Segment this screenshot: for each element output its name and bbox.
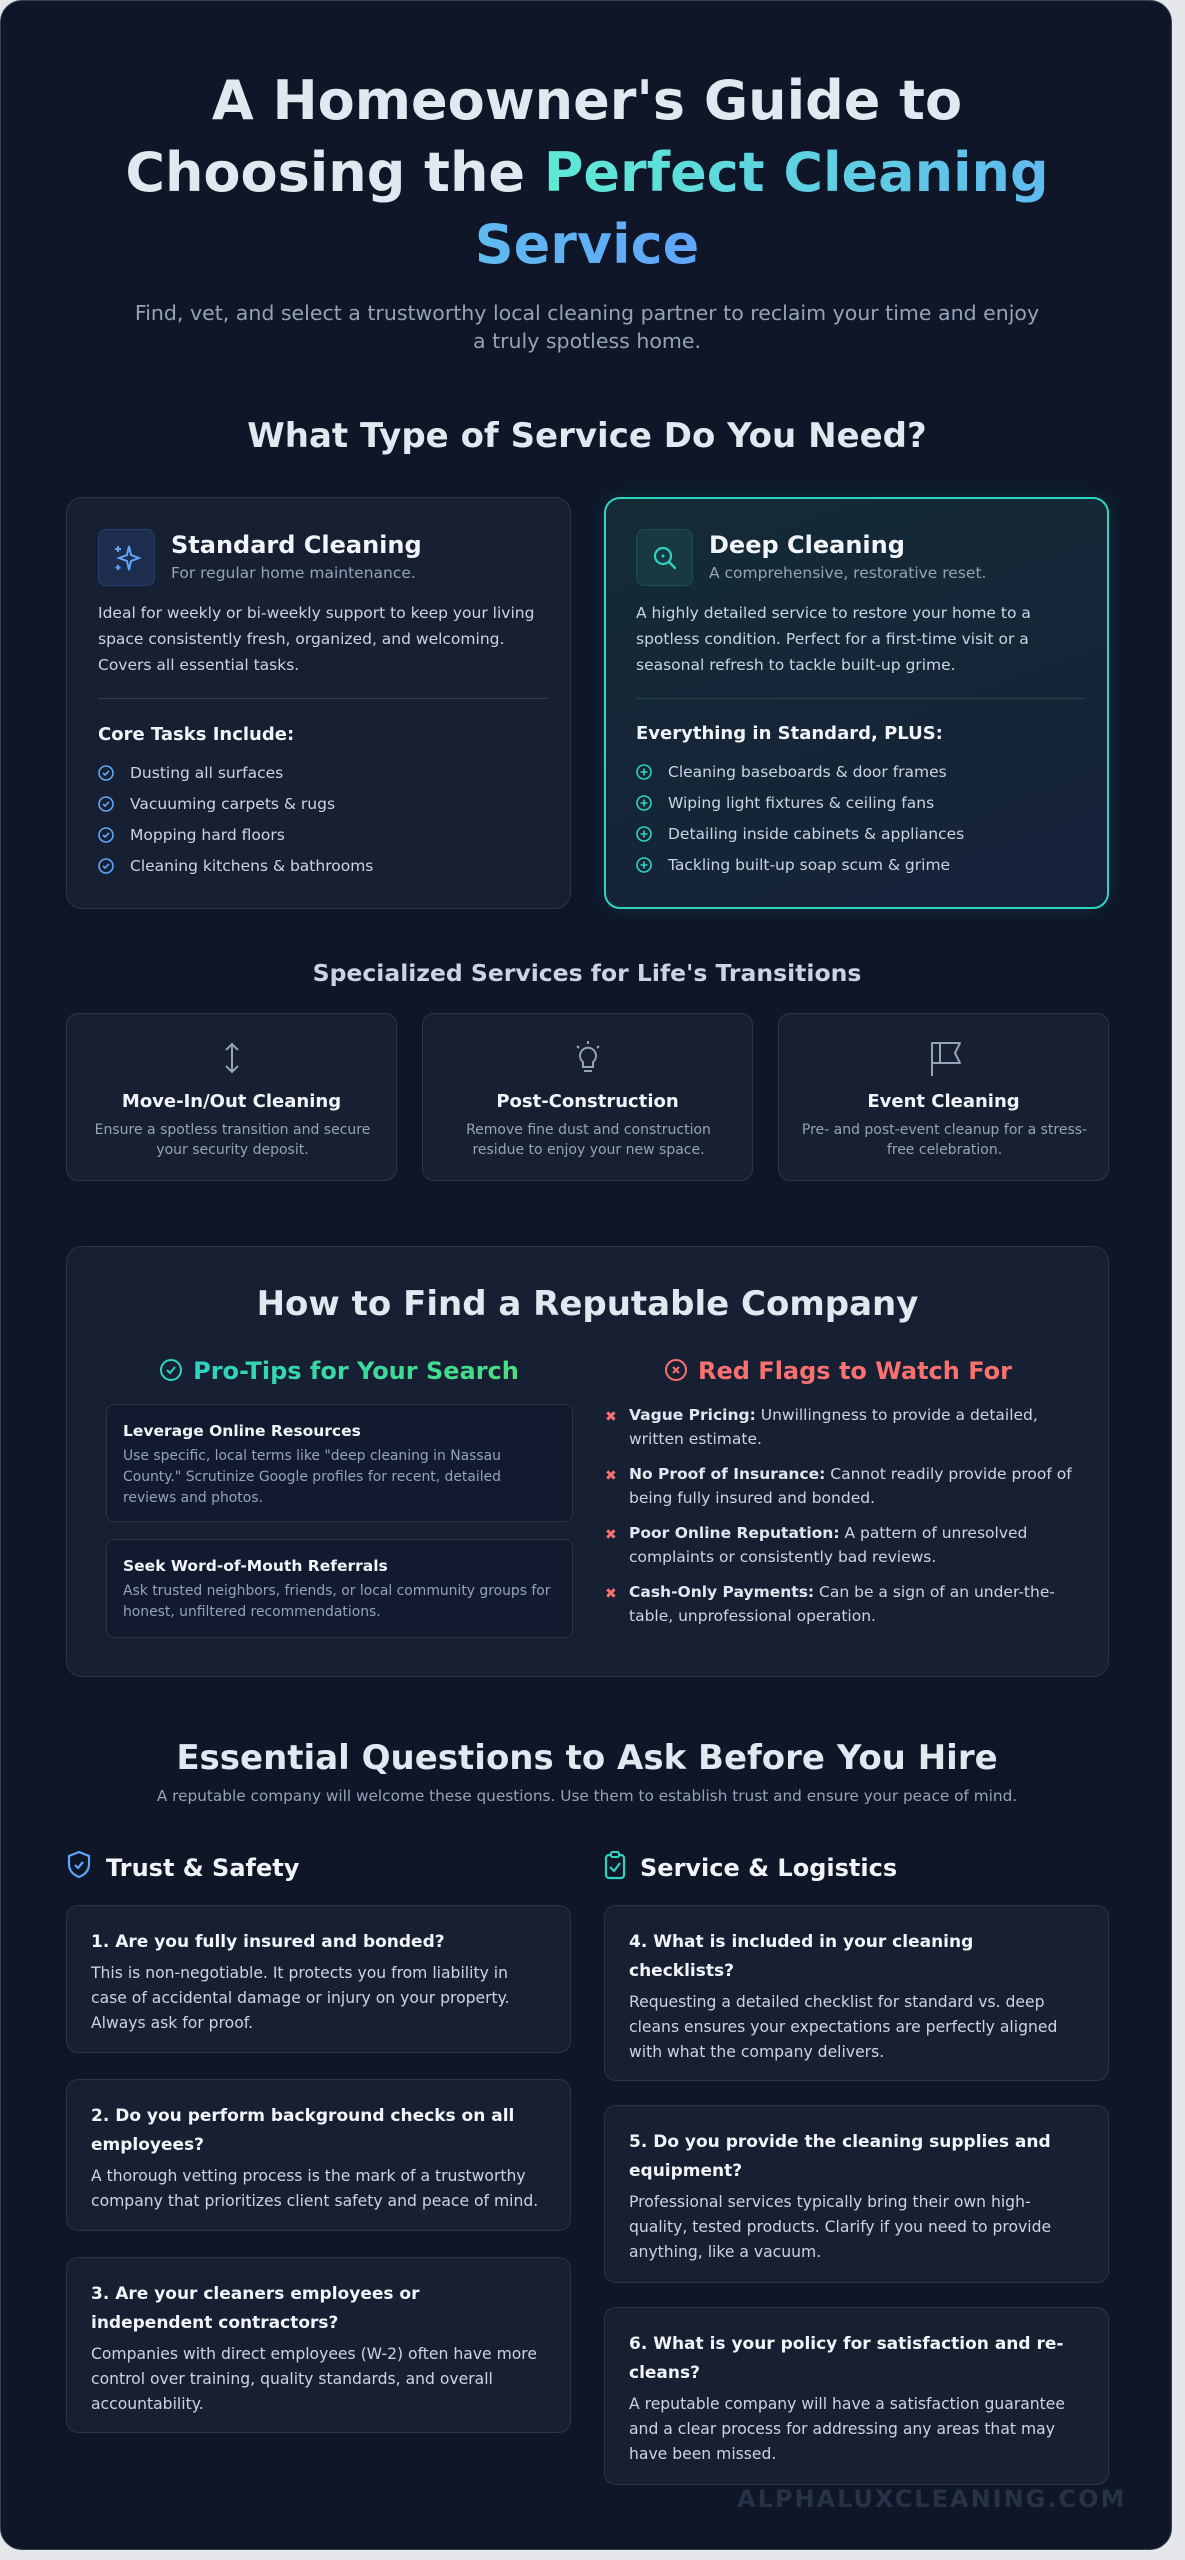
question 5: 5. Do you provide the cleaning supplies and equipment? (629, 2132, 1051, 2181)
text: Poor Online Reputation: A pattern of unresolved complaints or consistently bad reviews. (629, 1524, 1027, 1566)
question 3: control over training, quality standards, and overall (91, 2370, 493, 2388)
heading: essential questions: Essential Questions to Ask Before You Hire (176, 1738, 998, 1778)
question 4: with what the company delivers. (629, 2043, 884, 2061)
icon: lightbulb (576, 1041, 600, 1072)
tip: referrals: Seek Word-of-Mouth Referrals (123, 1557, 388, 1575)
icon: arrows (225, 1042, 239, 1074)
panel: find reputable company (66, 1246, 1109, 1677)
text: Cash-Only Payments: Can be a sign of an under-the-table, unprofessional operation. (629, 1583, 1055, 1625)
tip: online resources: Use specific, local terms like "deep cleaning in Nassau (123, 1448, 501, 1464)
column heading: trust & safety: Trust & Safety (106, 1854, 299, 1882)
description: A highly detailed service to restore your home to a spotless condition. Perfect for a first-time visit or a seasonal refresh to tackle built-up grime. (636, 604, 1031, 674)
card: post-construction: Remove fine dust and construction residue to enjoy your new space. (466, 1122, 711, 1158)
extras list: Detailing inside cabinets & appliances (668, 825, 964, 843)
subtitle: a truly spotless home. (473, 329, 701, 353)
question 3: accountability. (91, 2395, 204, 2413)
question 1 (66, 1905, 571, 2053)
question 2: company that prioritizes client safety and peace of mind. (91, 2192, 538, 2210)
question 6: and a clear process for addressing any areas that may (629, 2420, 1055, 2438)
question 1: This is non-negotiable. It protects you from liability in (91, 1964, 508, 1982)
subheading: A reputable company will welcome these questions. Use them to establish trust and ensure your peace of mind. (157, 1787, 1017, 1805)
question 3 (66, 2257, 571, 2433)
heading: red flags: Red Flags to Watch For (698, 1357, 1012, 1385)
card: event cleaning: Pre- and post-event cleanup for a stress-free celebration. (802, 1122, 1087, 1158)
question 1: Always ask for proof. (91, 2014, 253, 2032)
text: No Proof of Insurance: Cannot readily provide proof of being fully insured and bonded. (629, 1465, 1072, 1507)
question 5: anything, like a vacuum. (629, 2243, 821, 2261)
red flags list (605, 1406, 1072, 1625)
heading: How to Find a Reputable Company (257, 1284, 918, 1324)
icon: flag (931, 1042, 961, 1076)
tip: online resources: Leverage Online Resources (123, 1422, 361, 1440)
panel: standard cleaning: For regular home maintenance. (171, 564, 416, 582)
question 5 (604, 2105, 1109, 2283)
card: post-construction: Post-Construction (496, 1091, 679, 1112)
description: Ideal for weekly or bi-weekly support to keep your living space consistently fresh, organized, and welcoming. Covers all essential tasks. (98, 604, 534, 674)
card: post-construction (422, 1013, 753, 1181)
question 2: 2. Do you perform background checks on all employees? (91, 2106, 514, 2155)
card title: Standard Cleaning (171, 531, 422, 559)
watermark: ALPHALUXCLEANING.COM (737, 2485, 1126, 2513)
card: event cleaning (778, 1013, 1109, 1181)
card: event cleaning: Event Cleaning (867, 1091, 1020, 1112)
question 2: A thorough vetting process is the mark of a trustworthy (91, 2167, 526, 2185)
text: Vague Pricing: Unwillingness to provide a detailed, written estimate. (629, 1406, 1038, 1448)
card title: Deep Cleaning (709, 531, 905, 559)
text: ✖ (605, 1409, 617, 1425)
icon: magnifier (636, 529, 693, 586)
question 4: cleans ensures your expectations are perfectly aligned (629, 2018, 1057, 2036)
panel: deep cleaning (604, 497, 1109, 909)
tip: online resources (106, 1404, 573, 1522)
question 6 (604, 2307, 1109, 2485)
heading: pro tips: Pro-Tips for Your Search (193, 1357, 519, 1385)
extras list: Tackling built-up soap scum & grime (668, 856, 950, 874)
task list: Vacuuming carpets & rugs (130, 795, 335, 813)
card: move in/out: Move-In/Out Cleaning (122, 1091, 341, 1112)
text: ✖ (605, 1468, 617, 1484)
text: ✖ (605, 1527, 617, 1543)
text: ✖ (605, 1586, 617, 1602)
tip: online resources: County." Scrutinize Google profiles for recent, detailed reviews and photos. (123, 1469, 501, 1506)
card: move in/out (66, 1013, 397, 1181)
task list (98, 724, 373, 875)
question 5: quality, tested products. Clarify if you need to provide (629, 2218, 1051, 2236)
extras list: Everything in Standard, PLUS: (636, 723, 943, 744)
column heading: service & logistics: Service & Logistics (640, 1854, 897, 1882)
heading: specialized services: Specialized Services for Life's Transitions (313, 959, 861, 987)
question 4: Requesting a detailed checklist for standard vs. deep (629, 1993, 1044, 2011)
panel: deep cleaning: A comprehensive, restorative reset. (709, 564, 986, 582)
extras list: Cleaning baseboards & door frames (668, 763, 947, 781)
question 1: 1. Are you fully insured and bonded? (91, 1932, 445, 1952)
question 4: 4. What is included in your cleaning checklists? (629, 1932, 973, 1981)
task list: Cleaning kitchens & bathrooms (130, 857, 373, 875)
question 5: Professional services typically bring their own high- (629, 2193, 1031, 2211)
tip: referrals: Ask trusted neighbors, friends, or local community groups for honest, unfiltered recommendations. (123, 1583, 550, 1620)
extras list: Wiping light fixtures & ceiling fans (668, 794, 934, 812)
subtitle: Find, vet, and select a trustworthy local cleaning partner to reclaim your time and enjoy (135, 301, 1039, 325)
panel: standard cleaning (66, 497, 571, 909)
subtitle (135, 301, 1039, 353)
title (125, 69, 1049, 276)
question 3: Companies with direct employees (W-2) often have more (91, 2345, 537, 2363)
title: A Homeowner's Guide to (212, 69, 962, 132)
question 6: 6. What is your policy for satisfaction and re-cleans? (629, 2334, 1063, 2383)
question 3: 3. Are your cleaners employees or independent contractors? (91, 2284, 419, 2333)
extras list (636, 723, 964, 874)
question 2 (66, 2079, 571, 2231)
question 4 (604, 1905, 1109, 2081)
question 6: have been missed. (629, 2445, 776, 2463)
task list: Dusting all surfaces (130, 764, 283, 782)
task list: Mopping hard floors (130, 826, 285, 844)
card: move in/out: Ensure a spotless transition and secure your security deposit. (95, 1122, 370, 1158)
question 6: A reputable company will have a satisfaction guarantee (629, 2395, 1065, 2413)
icon: sparkle (98, 529, 155, 586)
title: Service (475, 213, 699, 276)
title: Choosing the Perfect Cleaning (125, 141, 1049, 204)
question 1: case of accidental damage or injury on your property. (91, 1989, 510, 2007)
tip: referrals (106, 1539, 573, 1638)
task list: Core Tasks Include: (98, 724, 294, 745)
heading: service type: What Type of Service Do You Need? (247, 416, 927, 456)
